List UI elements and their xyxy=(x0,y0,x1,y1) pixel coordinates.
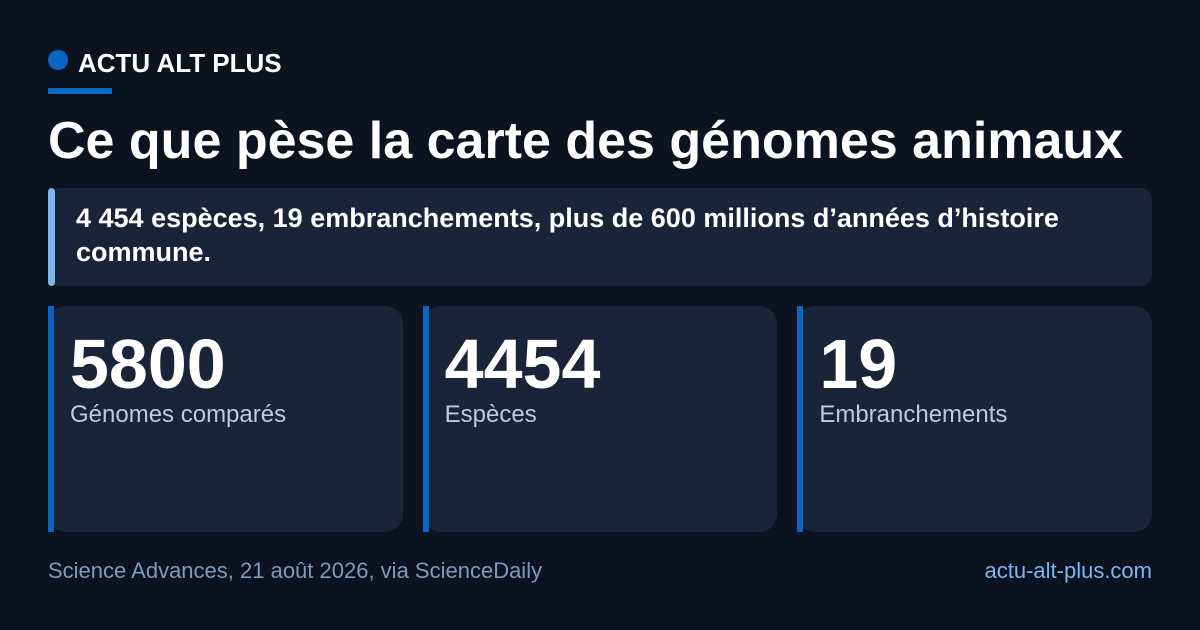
panel: summary xyxy=(48,188,1152,286)
summary accent bar xyxy=(48,188,55,286)
stat label: Génomes comparés xyxy=(70,401,286,428)
card accent bar xyxy=(423,306,429,532)
panel: stat species xyxy=(423,306,777,532)
summary text: commune. xyxy=(76,237,211,267)
stat label: Espèces xyxy=(445,401,537,428)
stat label: Embranchements xyxy=(819,401,1007,428)
card accent bar xyxy=(797,306,803,532)
brand header xyxy=(48,48,282,94)
card accent bar xyxy=(48,306,54,532)
icon: brand dot xyxy=(48,50,68,70)
source text: Science Advances, 21 août 2026, via ScienceDaily xyxy=(48,558,542,583)
panel: stat phyla xyxy=(797,306,1152,532)
brand underline xyxy=(48,88,112,94)
title: Ce que pèse la carte des génomes animaux xyxy=(48,112,1123,170)
site link text: actu-alt-plus.com xyxy=(984,558,1152,583)
stat number: 19 xyxy=(819,325,897,403)
panel: stat genomes xyxy=(48,306,403,532)
summary text xyxy=(76,203,1059,267)
stat number: 5800 xyxy=(70,325,226,403)
summary text: 4 454 espèces, 19 embranchements, plus de 600 millions d’années d’histoire xyxy=(76,203,1059,233)
stat number: 4454 xyxy=(445,325,600,403)
brand name: ACTU ALT PLUS xyxy=(78,48,282,78)
